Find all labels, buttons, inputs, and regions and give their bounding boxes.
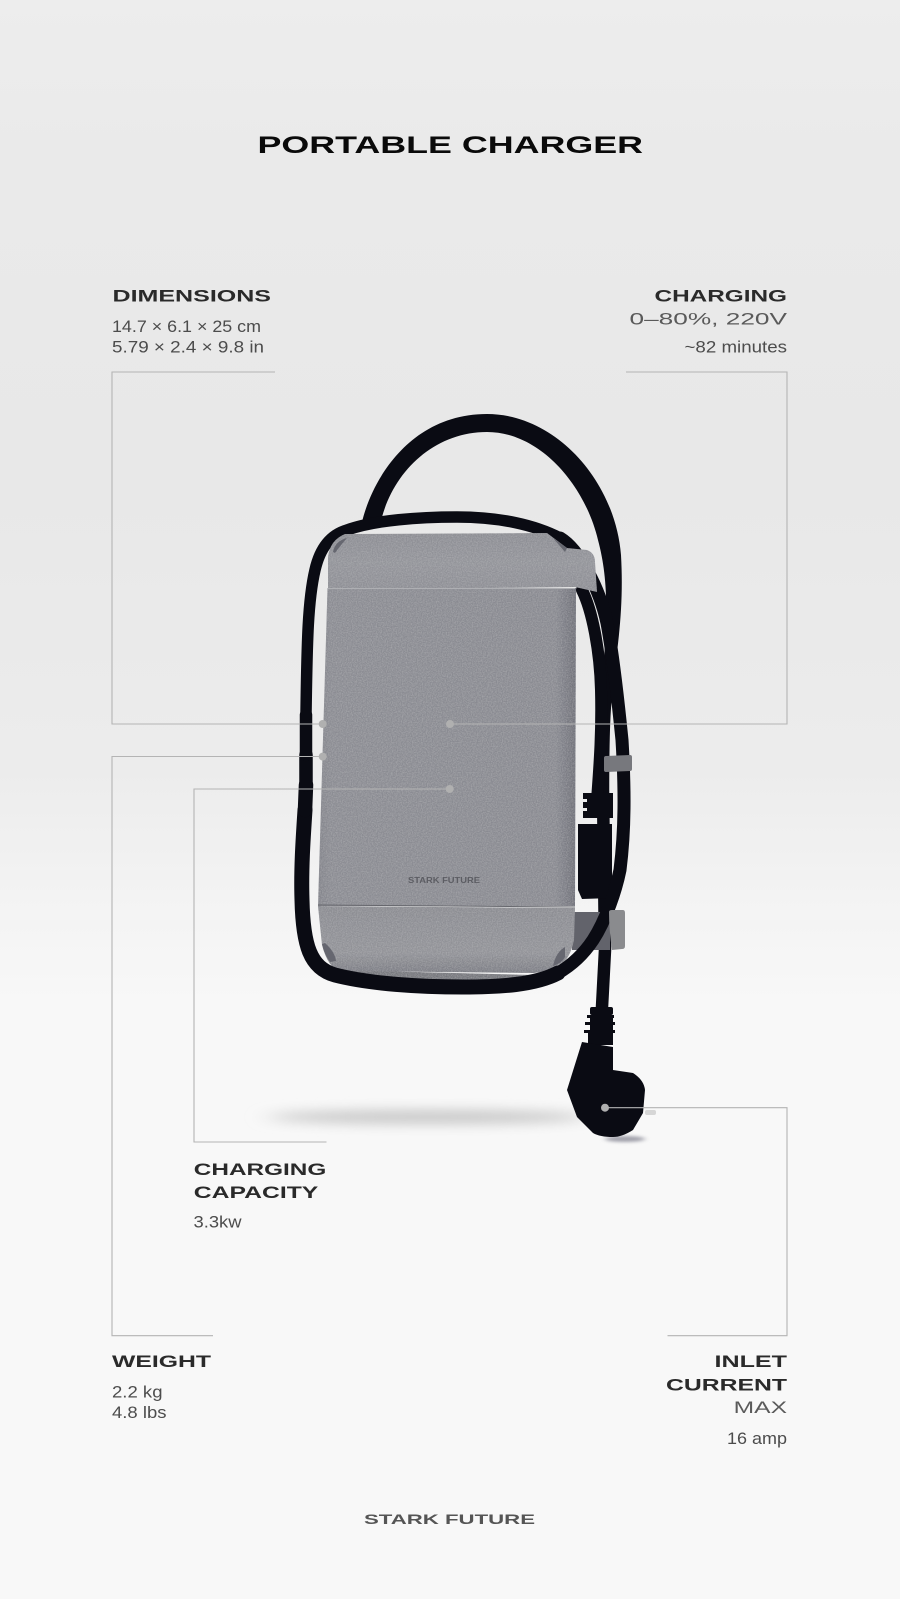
weight text block: 2.2 kg (112, 1383, 162, 1402)
floating shadow under charger (268, 1110, 645, 1142)
cable: bottom loop (302, 810, 558, 987)
charger top cap (328, 533, 597, 592)
cable: wrap from right side round the bottom (558, 538, 624, 973)
dimensions text block (112, 286, 271, 357)
charging text block: CHARGING (654, 286, 787, 306)
plug body (567, 1042, 645, 1137)
plug strain relief ribs (584, 1007, 615, 1045)
cable: short lead from under the cap (582, 590, 601, 800)
charging capacity text block: CHARGING (194, 1160, 326, 1179)
footer brand: STARK FUTURE (364, 1511, 535, 1527)
charging text block: ~82 minutes (684, 338, 787, 357)
plug pin (645, 1110, 656, 1115)
plug (567, 1007, 656, 1137)
seam line: top cap (328, 588, 575, 590)
leader: charging capacity (194, 789, 450, 1142)
inlet current text block: CURRENT (666, 1376, 788, 1395)
charger body (318, 588, 576, 981)
weight text block: WEIGHT (112, 1352, 212, 1371)
cable: left side, tapering steps (305, 517, 560, 810)
inlet current text block: INLET (714, 1352, 788, 1371)
callout dots (319, 720, 609, 1112)
charging capacity text block: CAPACITY (194, 1183, 319, 1202)
cable: large upper loop, tapered (362, 414, 622, 652)
lower corner chips (322, 943, 565, 966)
charging text block (630, 286, 788, 357)
power brick strain relief (578, 793, 613, 899)
leader: dimensions (112, 372, 323, 724)
leader: weight (112, 756, 323, 1336)
seam line: lower cap (318, 905, 575, 907)
cable: loop descending to plug (602, 648, 611, 1007)
weight text block: 4.8 lbs (112, 1403, 166, 1422)
dimensions text block: 14.7 × 6.1 × 25 cm (112, 317, 261, 336)
inlet current text block (666, 1352, 788, 1448)
charger product photo (302, 414, 656, 1137)
upper corner chips (333, 538, 567, 553)
charger side plate (572, 912, 610, 950)
inlet current text block: 16 amp (727, 1429, 787, 1448)
weight text block (112, 1352, 212, 1422)
cable clip lower (609, 910, 625, 950)
charging capacity text block (194, 1160, 326, 1232)
dimensions text block: DIMENSIONS (112, 286, 271, 306)
charging text block: 0–80%, 220V (630, 310, 788, 328)
cable clip upper (604, 755, 632, 772)
inlet current text block: MAX (734, 1398, 787, 1417)
leader: inlet current (605, 1108, 787, 1336)
title: PORTABLE CHARGER (258, 132, 643, 159)
logo on charger: STARK FUTURE (408, 876, 481, 885)
dimensions text block: 5.79 × 2.4 × 9.8 in (112, 338, 264, 357)
charging capacity text block: 3.3kw (194, 1213, 242, 1232)
leader: charging (450, 372, 787, 724)
